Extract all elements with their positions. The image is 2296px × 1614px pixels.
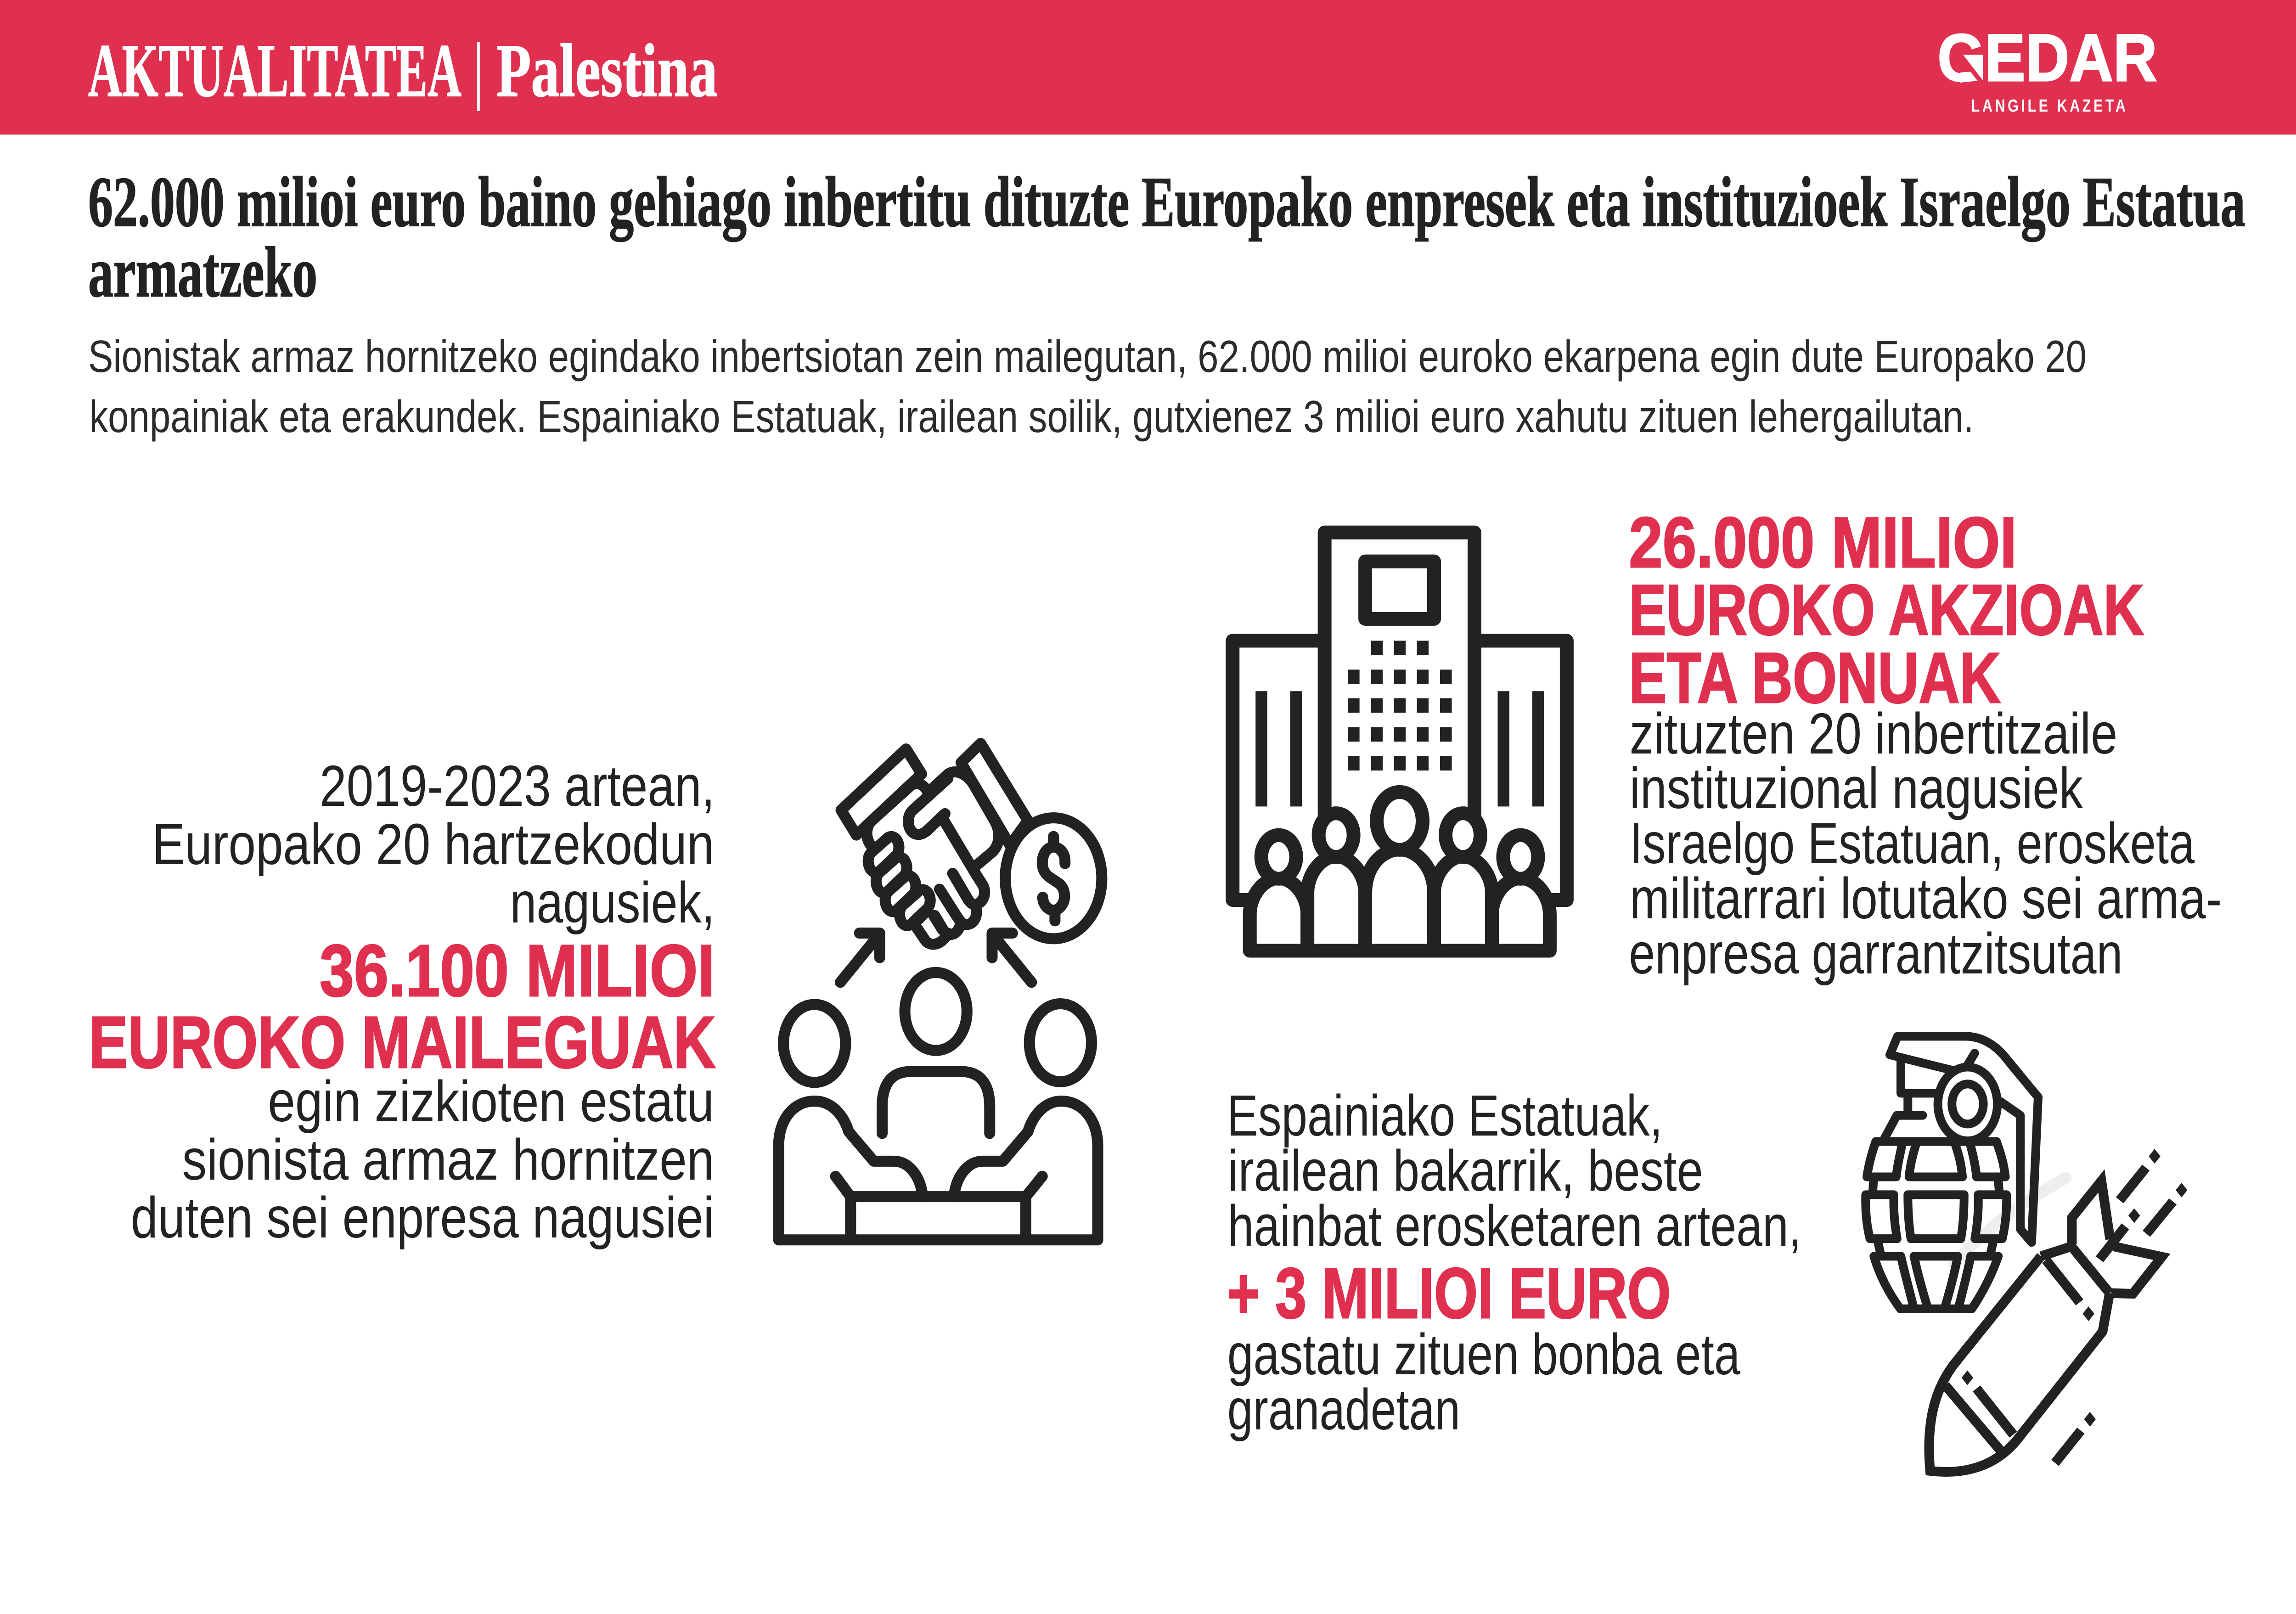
- text block: loans: duten sei enpresa nagusiei: [131, 1186, 714, 1250]
- text block: loans: EUROKO MAILEGUAK: [89, 1001, 715, 1083]
- logo: GEDAR Langile Kazeta: [1937, 21, 2157, 116]
- text block: shares: instituzional nagusiek: [1630, 756, 2083, 821]
- subtitle: konpainiak eta erakundek. Espainiako Estatuak, irailean soilik, gutxienez 3 milioi euro xahutu zituen lehergailutan.: [89, 392, 1974, 442]
- text block: Spanish state: Espainiako Estatuak,: [1227, 1084, 1663, 1148]
- logo: GEDAR Langile Kazeta: LANGILE KAZETA: [1971, 96, 2126, 116]
- text block: shares: ETA BONUAK: [1629, 638, 2001, 718]
- title: 62.000 milioi euro baino gehiago inbertitu dituzte Europako enpresek eta instituzioek Israelgo Estatua: [88, 163, 2245, 242]
- header label: Palestina: [496, 29, 717, 112]
- text block: loans: Europako 20 hartzekodun: [152, 812, 714, 877]
- text block: loans: egin zizkioten estatu: [268, 1069, 714, 1134]
- text block: shares: 26.000 MILIOI: [1629, 502, 2017, 582]
- text block: loans: sionista armaz hornitzen: [182, 1128, 714, 1192]
- text block: shares: militarrari lotutako sei arma-: [1630, 866, 2222, 931]
- text block: Spanish state: granadetan: [1227, 1378, 1460, 1442]
- text block: shares: EUROKO AKZIOAK: [1629, 570, 2144, 650]
- icon: office buildings and investors: [1232, 533, 1567, 951]
- subtitle: [88, 332, 2087, 442]
- header band: [0, 0, 2296, 135]
- text block: loans: nagusiek,: [510, 871, 715, 935]
- title: [88, 163, 2245, 312]
- text block: Spanish state: gastatu zituen bonba eta: [1227, 1322, 1740, 1387]
- text block: loans: 36.100 MILIOI: [320, 929, 715, 1012]
- text block: loans: 2019-2023 artean,: [320, 754, 715, 819]
- text block: loans: [89, 754, 715, 1250]
- text block: Spanish state: irailean bakarrik, beste: [1228, 1139, 1703, 1203]
- header label: AKTUALITATEA: [88, 29, 461, 112]
- logo: GEDAR Langile Kazeta: GEDAR: [1937, 21, 2157, 96]
- text block: shares: zituzten 20 inbertitzaile: [1630, 702, 2117, 766]
- subtitle: Sionistak armaz hornitzeko egindako inbertsiotan zein mailegutan, 62.000 milioi euroko ekarpena egin dute Europako 20: [88, 332, 2087, 382]
- text block: shares: [1629, 502, 2222, 986]
- text block: shares: enpresa garrantzitsutan: [1629, 922, 2122, 986]
- title: armatzeko: [88, 233, 317, 312]
- text block: Spanish state: + 3 MILIOI EURO: [1227, 1253, 1671, 1333]
- icon: grenade and bomb: [1866, 1036, 2188, 1472]
- text block: Spanish state: [1227, 1084, 1801, 1442]
- icon: people meeting with handshake and coin: [779, 743, 1102, 1240]
- text block: shares: Israelgo Estatuan, erosketa: [1630, 811, 2195, 876]
- text block: Spanish state: hainbat erosketaren artean,: [1228, 1194, 1801, 1259]
